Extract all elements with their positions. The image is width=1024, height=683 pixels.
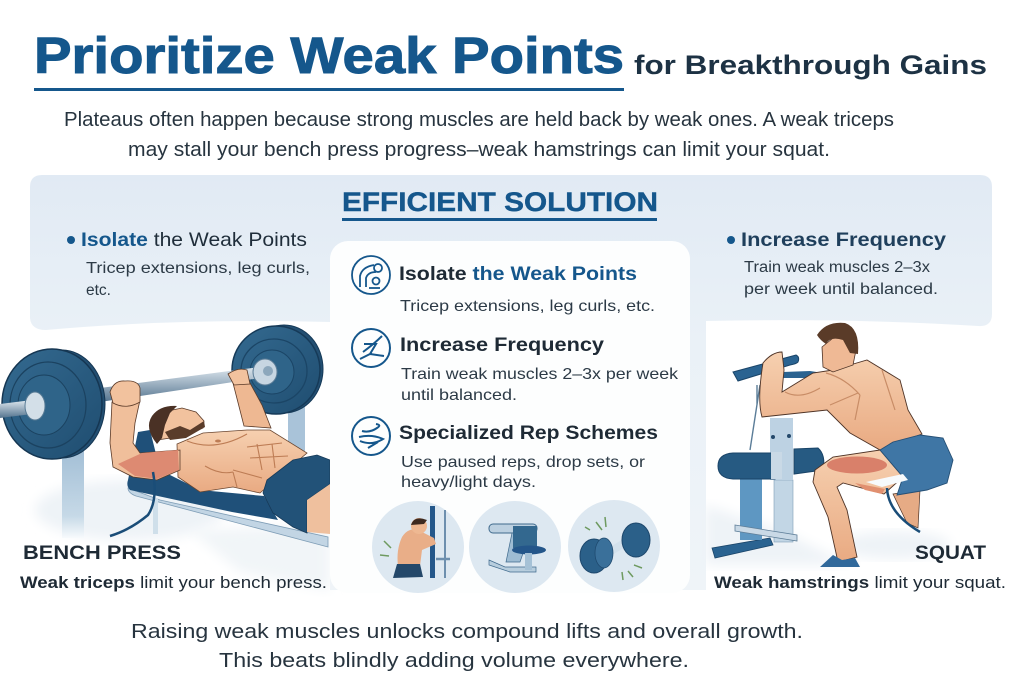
- title: Prioritize Weak Points: [34, 27, 624, 84]
- far arm: [233, 383, 271, 428]
- thumbnail: dumbbell: [568, 500, 660, 592]
- bench uprights: [62, 450, 84, 538]
- head: [822, 334, 857, 372]
- right callout: increase frequency: per week until balanced.: [744, 281, 938, 298]
- head: [157, 408, 204, 440]
- thumbnail: tricep exercise: [372, 501, 464, 593]
- machine: [712, 538, 773, 558]
- item: increase frequency: Train weak muscles 2–3x per week: [401, 366, 679, 383]
- item: specialized rep schemes: heavy/light days.: [401, 474, 536, 491]
- closing text: [131, 621, 803, 672]
- label: bench press: [20, 542, 327, 592]
- bar: [100, 367, 260, 402]
- pointer arrow: [110, 472, 155, 536]
- bench pad: [127, 430, 278, 520]
- icon: rep schemes: [352, 417, 390, 455]
- near plates: [19, 350, 105, 458]
- icon: isolate: [352, 256, 390, 294]
- shorts: [263, 455, 330, 533]
- back and arm: [760, 352, 922, 450]
- item: isolate: Tricep extensions, leg curls, etc.: [400, 298, 655, 315]
- squat illustration: [705, 323, 953, 567]
- left callout: isolate: etc.: [86, 282, 111, 299]
- title: [34, 27, 987, 91]
- far plates: [245, 325, 323, 413]
- left callout: isolate: [67, 229, 310, 299]
- triceps highlight: [118, 450, 179, 479]
- icon: frequency: [352, 329, 390, 367]
- item: increase frequency: Increase Frequency: [400, 334, 604, 356]
- bench frame: [128, 488, 328, 547]
- front leg: [813, 450, 903, 562]
- item: specialized rep schemes: [352, 417, 658, 491]
- thumbnail: machine: [469, 501, 561, 593]
- near arm: [110, 400, 180, 480]
- torso: [177, 430, 307, 493]
- pointer arrow: [887, 488, 920, 532]
- item: specialized rep schemes: Use paused reps, drop sets, or: [401, 454, 646, 471]
- intro text: may stall your bench press progress–weak hamstrings can limit your squat.: [128, 138, 830, 161]
- left callout: isolate: Isolate the Weak Points: [81, 229, 307, 251]
- intro text: Plateaus often happen because strong muscles are held back by weak ones. A weak triceps: [64, 108, 894, 131]
- right callout: increase frequency: Increase Frequency: [741, 229, 946, 251]
- label: bench press: BENCH PRESS: [23, 542, 181, 564]
- label: bench press: Weak triceps limit your bench press.: [20, 574, 327, 592]
- closing text: This beats blindly adding volume everywhere.: [219, 650, 689, 672]
- label: squat: [714, 542, 1006, 592]
- item: specialized rep schemes: Specialized Rep Schemes: [399, 422, 658, 444]
- label: squat: Weak hamstrings limit your squat.: [714, 574, 1006, 592]
- left callout: isolate: Tricep extensions, leg curls,: [86, 260, 310, 277]
- shorts: [880, 435, 953, 495]
- heading: efficient solution: EFFICIENT SOLUTION: [342, 187, 658, 217]
- item: isolate: [352, 256, 655, 315]
- label: squat: SQUAT: [915, 542, 986, 564]
- right callout: increase frequency: Train weak muscles 2–3x: [744, 259, 930, 276]
- right callout: increase frequency: [727, 229, 946, 298]
- item: isolate: Isolate the Weak Points: [399, 263, 637, 285]
- background panel: efficient solution: [30, 175, 992, 590]
- item: increase frequency: [352, 329, 679, 404]
- closing text: Raising weak muscles unlocks compound lifts and overall growth.: [131, 621, 803, 643]
- intro text: [64, 108, 894, 161]
- center card: [330, 241, 690, 593]
- bench press illustration: [0, 325, 330, 590]
- hamstring highlight: [827, 456, 887, 474]
- item: increase frequency: until balanced.: [401, 387, 517, 404]
- title: for Breakthrough Gains: [634, 50, 987, 80]
- rear calf: [893, 490, 920, 528]
- shoe: [820, 555, 860, 567]
